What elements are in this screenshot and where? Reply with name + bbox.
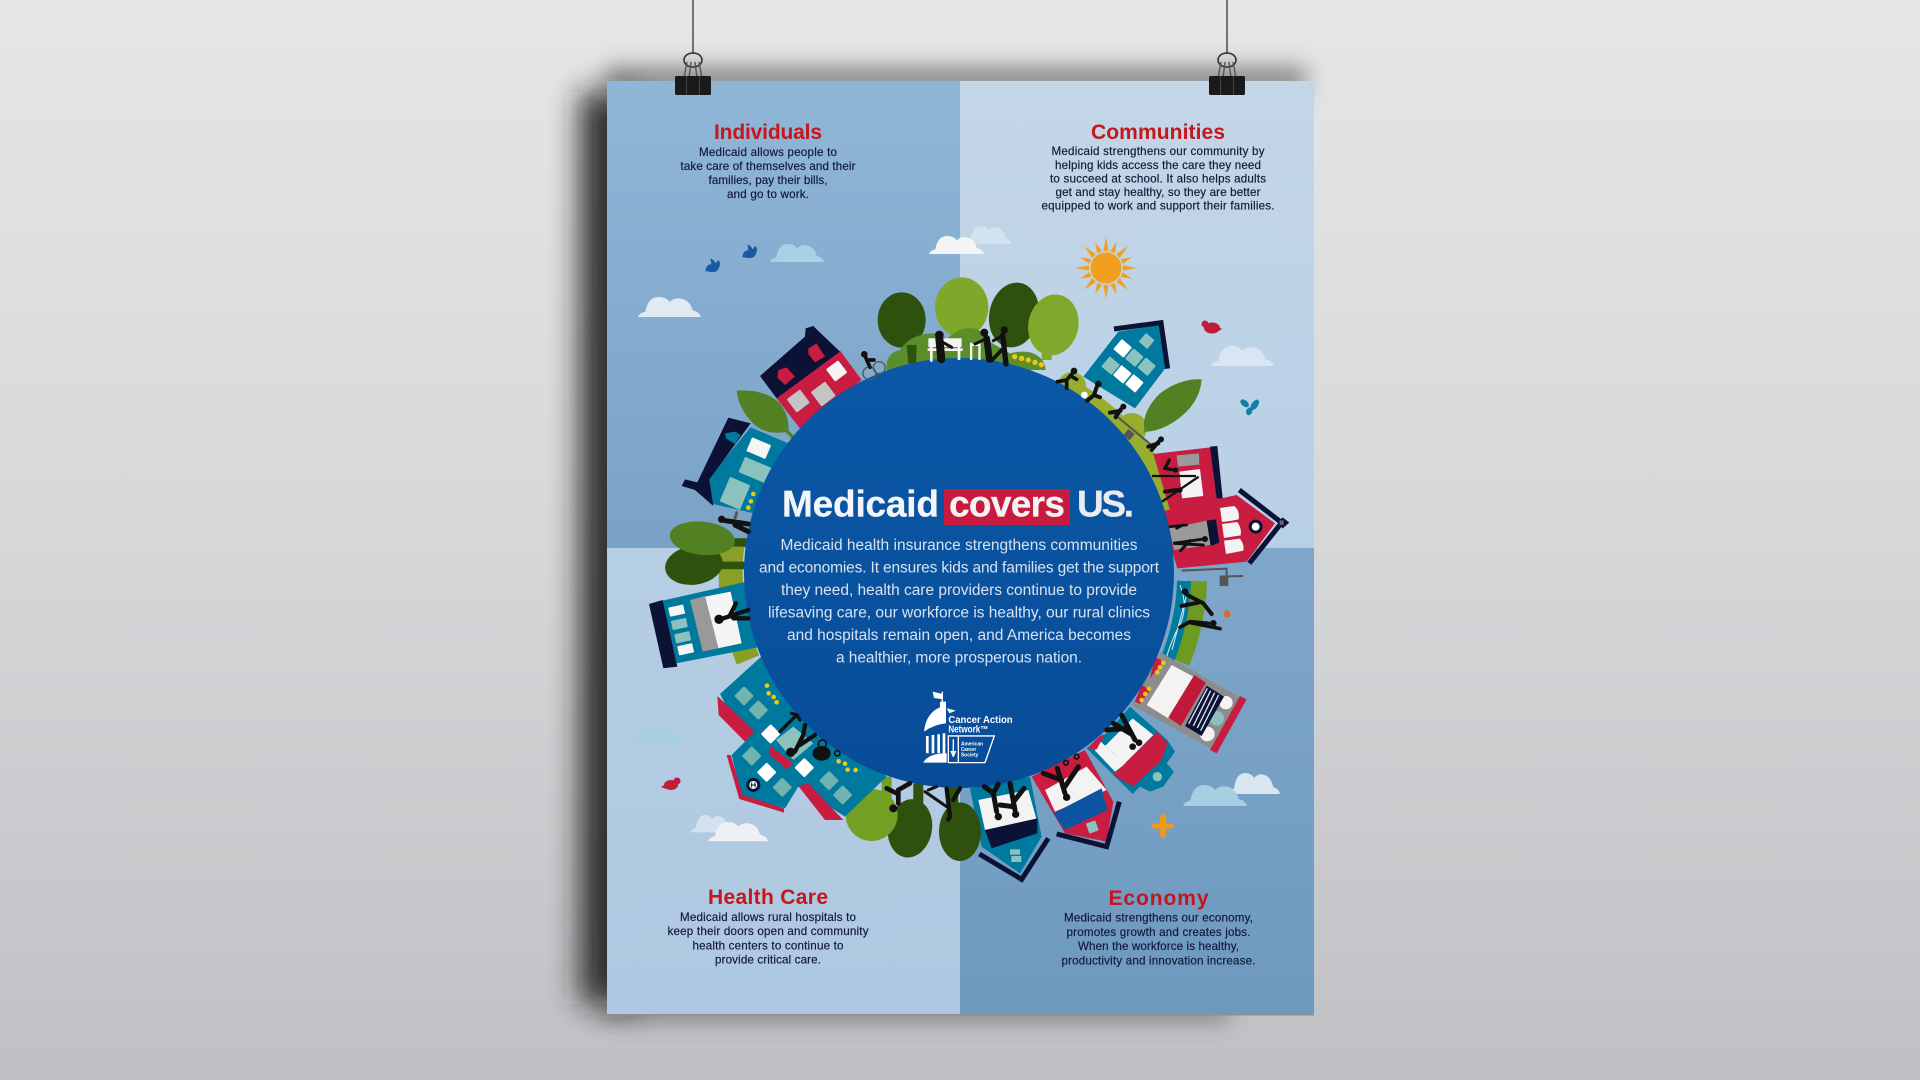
intro paragraph: a healthier, more prosperous nation. [836, 650, 1082, 666]
heading: Medicaid covers US: US. [1077, 484, 1134, 525]
poster shadow [580, 66, 1306, 1020]
poster [607, 81, 1314, 1016]
panel: Health Care: provide critical care. [715, 954, 821, 967]
people around the globe: left [714, 351, 885, 624]
panel: Communities: helping kids access the care they need [1055, 159, 1261, 172]
panel: Individuals [680, 121, 856, 201]
hanging wires [693, 0, 1227, 54]
logo: Cancer Action Network: American [961, 742, 983, 748]
tree and leaves: right upper [1143, 379, 1202, 433]
trees: bottom of globe [846, 777, 981, 861]
poster quadrant backgrounds [607, 81, 1314, 1016]
house: blue awning red [1032, 750, 1119, 847]
house: navy roof red upper left [760, 326, 862, 428]
icon: red birds [661, 320, 1222, 790]
hospital: teal complex with red roofs [717, 652, 887, 820]
logo: Cancer Action Network: Network™ [948, 724, 988, 735]
panel: Communities: get and stay healthy, so they are better [1056, 186, 1261, 199]
panel: Health Care: health centers to continue to [692, 939, 844, 952]
panel: Economy: When the workforce is healthy, [1078, 940, 1239, 953]
panel: Individuals: and go to work. [727, 188, 809, 201]
people around the globe: lower left [765, 683, 960, 822]
intro paragraph: and hospitals remain open, and America becomes [787, 627, 1131, 644]
panel: Individuals: take care of themselves and their [680, 160, 856, 173]
market: grey and red building [1132, 652, 1247, 753]
panel: Economy [1062, 887, 1256, 967]
ground strips around the globe [731, 372, 1197, 665]
panel: Health Care [668, 886, 869, 967]
panel: Communities: to succeed at school. It also helps adults [1050, 172, 1266, 186]
panel: Communities: Communities [1091, 121, 1225, 144]
panel: Individuals: families, pay their bills, [708, 174, 828, 187]
intro paragraph: Medicaid health insurance strengthens communities [780, 537, 1138, 554]
binder clip: right [1209, 53, 1245, 95]
central blue circle [744, 358, 1174, 788]
panel: Economy: Economy [1108, 887, 1209, 910]
panel: Economy: productivity and innovation increase. [1062, 954, 1256, 967]
panel: Communities: Medicaid strengthens our community by [1052, 145, 1265, 158]
street lamp [1182, 569, 1243, 585]
panel: Health Care: Medicaid allows rural hospitals to [680, 911, 856, 924]
intro paragraph [759, 537, 1160, 666]
trees: top of globe [878, 277, 1084, 370]
logo: Cancer Action Network: Cancer [961, 747, 977, 753]
panel: Communities [1042, 121, 1274, 212]
icon: orange dot [1223, 610, 1231, 618]
flowers [1012, 354, 1044, 367]
shop: blue building left [649, 582, 762, 668]
icon: sun [1075, 237, 1137, 299]
people around the globe: top [928, 326, 1044, 367]
house: navy awning teal [970, 777, 1048, 879]
park bench [928, 338, 981, 362]
icon: blue birds [705, 244, 757, 272]
panel: Economy: Medicaid strengthens our economy, [1064, 912, 1253, 925]
panel: Individuals: Medicaid allows people to [699, 146, 837, 159]
panel: Communities: equipped to work and support their families. [1042, 200, 1274, 212]
people around the globe: upper right [1057, 368, 1220, 629]
intro paragraph: they need, health care providers continue to provide [781, 582, 1137, 599]
icon: teal butterfly [1236, 393, 1261, 418]
heading: Medicaid covers US [782, 484, 1134, 525]
binder clip: left [675, 53, 711, 95]
school: red building with clock [1152, 446, 1289, 568]
logo: Cancer Action Network: Society [961, 752, 979, 758]
house: red roof teal [1087, 707, 1175, 794]
house: teal upper left [682, 418, 788, 515]
icon: orange butterfly [1151, 814, 1174, 838]
panel: Health Care: Health Care [708, 886, 828, 909]
logo: Cancer Action Network: Cancer Action [948, 715, 1013, 726]
people around the globe: lower right [984, 715, 1142, 820]
logo: Cancer Action Network [923, 692, 1013, 763]
panel: Health Care: keep their doors open and community [668, 925, 869, 938]
intro paragraph: and economies. It ensures kids and families get the support [759, 560, 1160, 576]
intro paragraph: lifesaving care, our workforce is healthy, our rural clinics [768, 604, 1150, 622]
panel: Economy: promotes growth and creates jobs. [1066, 926, 1250, 939]
clouds [631, 226, 1280, 841]
heading: Medicaid covers US: covers [949, 484, 1065, 525]
panel: Individuals: Individuals [714, 121, 822, 144]
heading: Medicaid covers US: Medicaid [782, 484, 939, 525]
house: teal upper right [1083, 323, 1168, 408]
trees: left of globe [663, 390, 795, 588]
